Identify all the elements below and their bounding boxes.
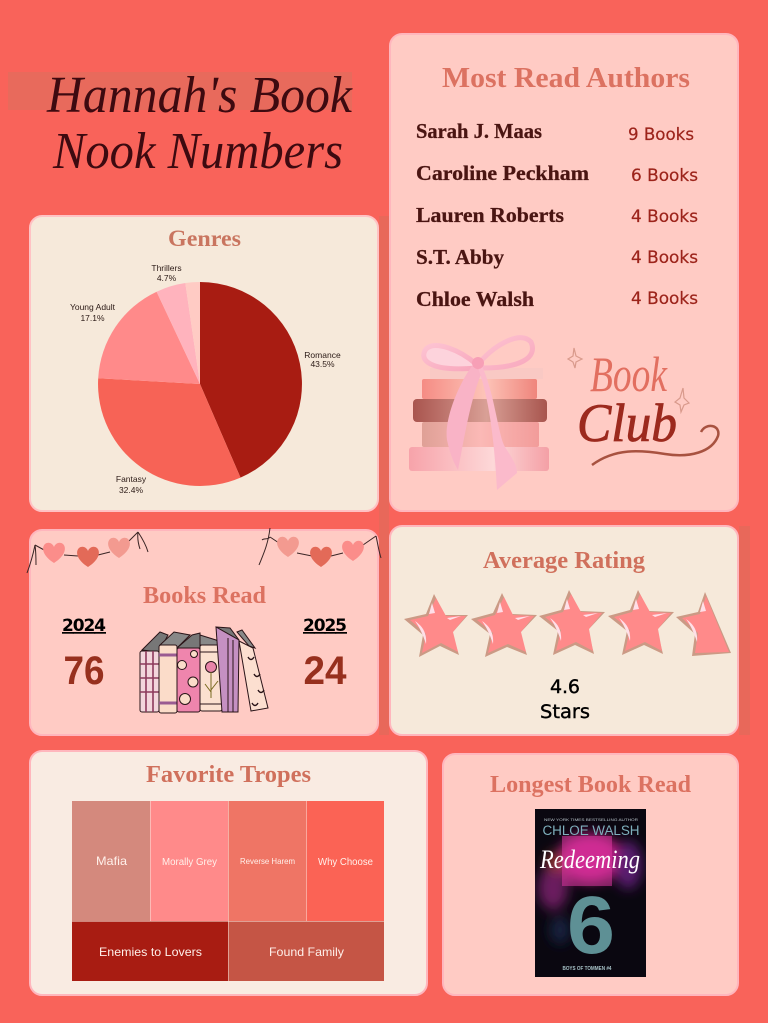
title: Hannah's Book	[46, 67, 353, 124]
book cover: BOYS OF TOMMEN #4	[562, 966, 612, 972]
illustration: book club lettering	[568, 346, 718, 465]
treemap cell: why choose: Why Choose	[318, 857, 373, 868]
panel: longest book read	[443, 754, 738, 995]
banner: left hearts	[27, 532, 148, 573]
author row: Sarah J. Maas: 9 Books	[628, 125, 694, 145]
stat: 2024: 2024	[62, 616, 106, 636]
compression tint right of left panels	[379, 216, 389, 735]
pie label: thrillers	[151, 263, 182, 283]
treemap cell: morally grey	[150, 801, 228, 921]
pie label: thrillers: Thrillers	[151, 263, 182, 273]
star 2	[471, 593, 537, 657]
heading: genres: Genres	[168, 226, 241, 251]
treemap cell: enemies to lovers: Enemies to Lovers	[99, 945, 202, 959]
star 3	[539, 590, 605, 655]
star 1	[404, 594, 468, 657]
pie label: fantasy	[116, 474, 147, 495]
pie label: fantasy: Fantasy	[116, 474, 147, 484]
star 5 partial	[676, 592, 731, 656]
pie label: fantasy: 32.4%	[119, 485, 143, 495]
treemap cell: mafia: Mafia	[96, 854, 127, 868]
book cover: NEW YORK TIMES BESTSELLING AUTHOR	[544, 817, 638, 822]
pie label: thrillers: 4.7%	[157, 273, 177, 283]
author row: S.T. Abby	[416, 245, 698, 269]
author row: Sarah J. Maas	[416, 119, 694, 145]
book cover	[535, 809, 646, 977]
star 4	[608, 590, 674, 655]
treemap cell: morally grey: Morally Grey	[162, 857, 217, 868]
panel: favorite tropes	[30, 751, 427, 995]
pie chart	[98, 282, 302, 486]
pie label: romance: 43.5%	[310, 359, 335, 369]
compression tint behind title	[8, 72, 352, 110]
treemap cell: mafia	[72, 801, 150, 921]
banner: right hearts	[259, 528, 381, 567]
panel: books read	[27, 528, 381, 735]
pie label: young adult	[70, 302, 116, 323]
panel: genres	[30, 216, 378, 511]
author row: Caroline Peckham: Caroline Peckham	[416, 161, 590, 185]
pie label: romance	[304, 350, 341, 369]
author row: S.T. Abby: S.T. Abby	[416, 245, 504, 269]
heading: longest book read: Longest Book Read	[490, 772, 692, 798]
pie label: young adult: 17.1%	[80, 313, 105, 323]
book cover: CHLOE WALSH	[542, 823, 640, 838]
treemap	[72, 801, 384, 981]
heading: favorite tropes: Favorite Tropes	[146, 762, 311, 788]
illustration: book club lettering: Club	[577, 393, 677, 453]
stat: 2025	[303, 616, 347, 693]
rating value	[540, 676, 590, 723]
book cover: Redeeming	[539, 845, 640, 874]
author row: Lauren Roberts: 4 Books	[631, 207, 698, 227]
stat: 2024	[62, 616, 106, 693]
pie label: romance: Romance	[304, 350, 341, 360]
rating value: Stars	[540, 701, 590, 723]
book cover: 6	[567, 880, 615, 971]
treemap cell: enemies to lovers	[72, 922, 228, 981]
heading: books read: Books Read	[143, 583, 267, 609]
author row: Sarah J. Maas: Sarah J. Maas	[416, 119, 542, 143]
illustration: row of books	[140, 627, 268, 713]
stat: 2025: 24	[304, 649, 347, 693]
treemap cell: reverse harem: Reverse Harem	[240, 856, 295, 866]
stat: 2025: 2025	[303, 616, 347, 636]
author row: Chloe Walsh: Chloe Walsh	[416, 287, 534, 311]
treemap cell: why choose	[306, 801, 384, 921]
treemap cell: found family: Found Family	[269, 945, 344, 959]
author row: S.T. Abby: 4 Books	[631, 248, 698, 268]
author row: Chloe Walsh: 4 Books	[631, 289, 698, 309]
treemap cell: reverse harem	[228, 801, 306, 921]
compression tint right of rating panel	[739, 526, 750, 735]
stat: 2024: 76	[64, 649, 104, 693]
author row: Chloe Walsh	[416, 287, 698, 311]
author row: Lauren Roberts	[416, 203, 698, 227]
panel: average rating	[390, 526, 738, 735]
author row: Caroline Peckham: 6 Books	[631, 166, 698, 186]
pie label: young adult: Young Adult	[70, 302, 116, 312]
illustration: book stack with bow	[409, 338, 549, 490]
treemap cell: found family	[228, 922, 384, 981]
title: Nook Numbers	[52, 123, 343, 180]
title	[46, 67, 353, 180]
rating value: 4.6	[550, 676, 580, 698]
author row: Caroline Peckham	[416, 161, 698, 186]
heading: average rating: Average Rating	[483, 548, 645, 574]
heading: most read authors: Most Read Authors	[442, 62, 690, 94]
illustration: book club lettering: Book	[590, 346, 668, 402]
panel: most read authors	[390, 34, 738, 511]
author row: Lauren Roberts: Lauren Roberts	[416, 203, 564, 227]
